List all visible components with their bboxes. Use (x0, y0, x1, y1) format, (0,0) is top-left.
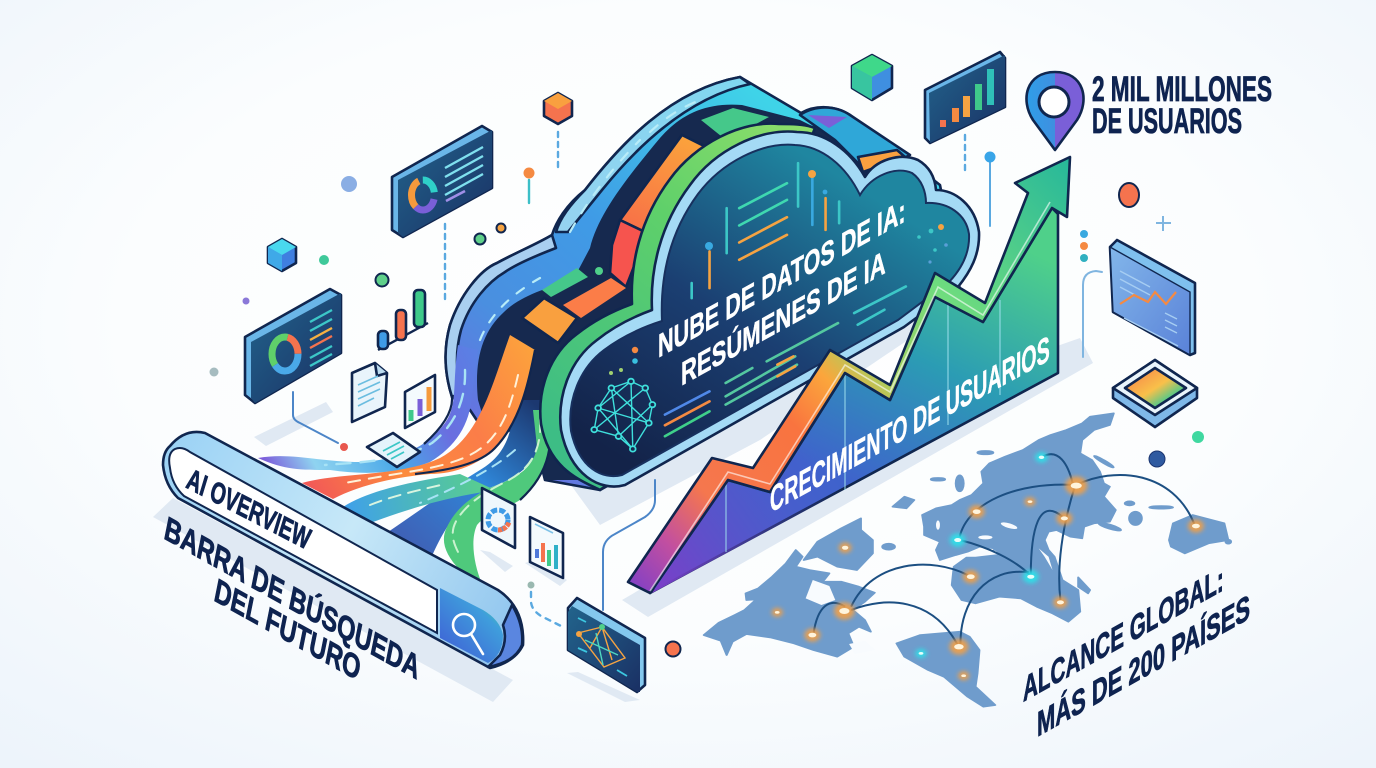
chart label: CRECIMIENTO DE USUARIOS (770, 327, 1050, 521)
search bar label: AI OVERVIEW (183, 463, 314, 557)
icon: neural network (591, 379, 655, 452)
icon: magnifier (453, 614, 483, 654)
icon: orange cube (544, 93, 572, 124)
icon: location pin (1026, 72, 1084, 150)
heading: users stat: 2 MIL MILLONES (1092, 70, 1272, 109)
panel: roads flowing into the search bar (258, 335, 550, 584)
icon: donut chart (272, 337, 298, 371)
icon: diamond note card (367, 433, 420, 467)
icon: network card (482, 488, 515, 548)
heading: cloud title: RESÚMENES DE IA (681, 243, 886, 393)
chart growth arrow (628, 157, 1070, 593)
cloud rim top (556, 77, 750, 232)
panel: trend card right (1110, 240, 1195, 355)
cloud back bump (800, 108, 910, 175)
panel: global reach world map (704, 413, 1231, 707)
icon: chart card (405, 375, 435, 428)
decorative dots (210, 152, 1204, 656)
heading: search bar title: DEL FUTURO (212, 571, 364, 688)
panel: dashboard card top (392, 126, 492, 237)
search button (440, 588, 503, 663)
cloud road band (446, 77, 960, 490)
search bar front edge (488, 605, 522, 667)
heading: global reach: ALCANCE GLOBAL: (1023, 559, 1224, 710)
panel: network dashboard bottom (568, 598, 645, 692)
map: continents (704, 413, 1231, 707)
icon: document (352, 363, 387, 422)
icon: mini bars card (530, 517, 563, 578)
panel: search bar (163, 432, 523, 668)
search bar input (169, 448, 437, 633)
panel: top bars card (925, 52, 1005, 143)
heading: users stat (1092, 70, 1272, 141)
road: green (444, 410, 550, 584)
icon: colour chip (1113, 360, 1197, 427)
cloud dark core (477, 105, 905, 480)
icon: bar chart mini (378, 290, 428, 350)
map: city glow nodes (772, 452, 1204, 680)
heading: users stat: DE USUARIOS (1092, 102, 1242, 141)
search bar body (163, 432, 523, 668)
road: blue green (343, 474, 495, 522)
chart grid lines (726, 300, 1000, 552)
ground shadows (153, 290, 1093, 702)
connector lines (293, 132, 1102, 627)
heading: cloud title: NUBE DE DATOS DE IA: (658, 191, 906, 365)
chart area (650, 208, 1058, 593)
road centre dashes (325, 370, 540, 552)
cloud dots (609, 170, 948, 375)
road: dark blue centre (388, 400, 548, 556)
chart area violet tint (652, 400, 900, 593)
cloud front face (570, 145, 969, 476)
panel: AI data cloud (540, 124, 979, 490)
icon: blue cube (268, 239, 296, 271)
chart: user growth (628, 157, 1070, 593)
road: orange (302, 335, 535, 499)
cloud data lines (665, 163, 906, 436)
panel: dashboard card left (245, 289, 341, 403)
road: blue violet (258, 345, 478, 473)
icon: donut ring (412, 180, 434, 210)
cloud green band (540, 124, 815, 490)
chart arrow highlight (650, 202, 1050, 591)
heading: global reach (1023, 559, 1250, 745)
map: white inland seas (806, 520, 1053, 654)
cloud rim left (446, 235, 556, 397)
heading: search bar title: BARRA DE BÚSQUEDA (162, 508, 423, 687)
cloud front rim (560, 132, 979, 487)
icon: green cube (852, 55, 892, 100)
road outlines (415, 350, 550, 500)
heading: search bar title (162, 508, 423, 688)
cloud blocks (808, 115, 847, 128)
map: connection arcs (814, 454, 1195, 645)
panel: cloud back layers (446, 77, 960, 490)
cloud road dashes (480, 100, 700, 340)
heading: global reach: MÁS DE 200 PAÍSES (1037, 586, 1250, 745)
